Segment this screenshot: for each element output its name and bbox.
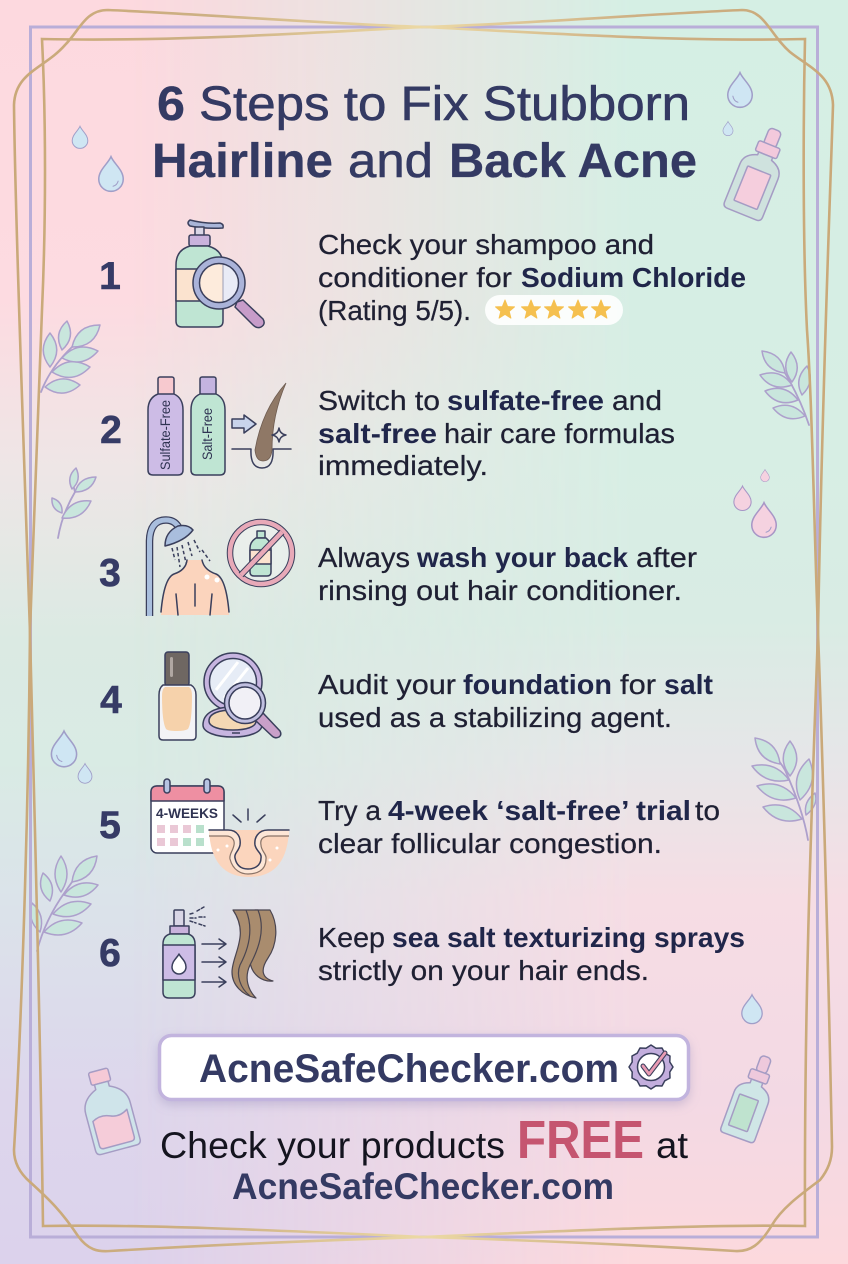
icon: shower over back and no-bottle sign [150,520,292,616]
step 3 text [318,542,697,606]
step 1 text [318,229,746,326]
step 1 text: (Rating 5/5). [318,295,471,326]
step 1 [99,220,746,328]
call-to-action button [160,1036,688,1100]
step 3 text: after [636,542,697,573]
step 5 text: clear follicular congestion. [318,828,662,859]
title [152,78,697,188]
step 1 number: 1 [99,255,121,298]
icon: sulfate-free and salt-free bottles with hair follicle: Sulfate-Free [158,400,173,470]
step 6 text: sea salt texturizing sprays [392,922,745,953]
icon: 4-week calendar and clear follicle: 4-WEEKS [156,806,218,821]
step 2 [100,377,675,481]
title: 6 [157,78,185,131]
step 4 text: foundation [463,669,612,700]
decorative leaf sprig: lower right [752,738,816,840]
step 2 text: Switch to [318,385,440,416]
step 5 text: 4-week ‘salt-free’ trial [388,795,691,826]
step 4 text: for [620,669,656,700]
step 5 text [318,795,720,859]
footer call to action: at [656,1125,689,1166]
step 6 text [318,922,745,986]
step 3 text: rinsing out hair conditioner. [318,575,682,606]
step 3 text: Always [318,542,410,573]
decorative water drops [51,73,776,1024]
step 3 text: wash your back [416,542,628,573]
icon: 4-week calendar and clear follicle [151,779,289,877]
icon: verified badge [629,1045,673,1089]
step 2 text: salt-free [318,418,437,449]
step 4 text: used as a stabilizing agent. [318,702,672,733]
decorative dropper bottle: bottom right [720,1050,783,1144]
title: Back Acne [449,135,697,188]
icon: foundation bottle and compact with magnifier [159,652,281,740]
step 6 number: 6 [99,932,121,975]
step 4 text: salt [664,669,713,700]
step 3 [99,520,697,616]
icon: spray bottle aimed at hair ends [163,907,276,998]
step 2 number: 2 [100,409,122,452]
decorative leaf sprig: upper right [760,351,810,425]
step 1 text: Check your shampoo and [318,229,654,260]
button url text: AcneSafeChecker.com [199,1047,619,1091]
step 3 number: 3 [99,552,121,595]
icon: sulfate-free and salt-free bottles with hair follicle [148,377,291,475]
step 4 text [318,669,713,733]
step 6 [99,907,745,998]
footer call to action: AcneSafeChecker.com [232,1166,614,1207]
decorative leaf sprig: upper left [41,321,100,393]
step 6 text: Keep [318,922,385,953]
footer call to action: FREE [517,1110,644,1170]
step 5 number: 5 [99,804,121,847]
step 2 text: and [612,385,662,416]
step 2 text: immediately. [318,450,488,481]
title: and [348,135,433,188]
step 4 [100,652,713,740]
icon: sulfate-free and salt-free bottles with hair follicle: Salt-Free [200,408,215,460]
decorative leaf sprig: small left [52,468,96,538]
step 2 text [318,385,675,481]
step 5 text: to [695,795,720,826]
step 4 number: 4 [100,679,122,722]
step 6 text: strictly on your hair ends. [318,955,649,986]
title: Steps to Fix Stubborn [199,78,690,131]
step 1 text: conditioner for [318,262,512,293]
decorative bottle: bottom left [76,1065,141,1156]
decorative leaf sprig: lower left [30,856,98,951]
five star rating [485,295,623,325]
icon: shampoo bottle with magnifier [176,220,264,328]
step 1 text: Sodium Chloride [521,262,746,293]
step 5 text: Try a [318,795,381,826]
decorative dropper bottle: top right [723,122,795,222]
step 5 [99,779,720,877]
step 4 text: Audit your [318,669,456,700]
step 2 text: hair care formulas [444,418,675,449]
footer call to action [160,1110,689,1207]
title: Hairline [152,135,333,188]
footer call to action: Check your products [160,1125,505,1166]
step 2 text: sulfate-free [447,385,604,416]
